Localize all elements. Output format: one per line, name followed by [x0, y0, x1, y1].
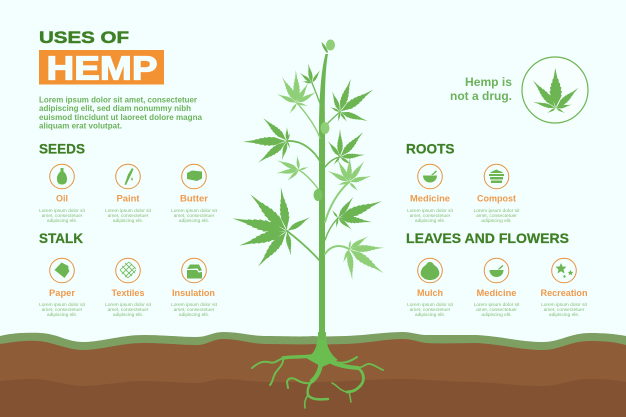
ground	[0, 332, 626, 417]
item: textiles: amet, consectetuer	[108, 307, 149, 313]
item: mulch	[407, 258, 454, 318]
leaf: upper left light	[276, 70, 317, 114]
item: insulation: adipiscing elit.	[179, 312, 209, 318]
item: compost: Compost	[477, 194, 517, 204]
item: textiles: Textiles	[112, 288, 144, 299]
heading: leaves and flowers: LEAVES AND FLOWERS	[406, 230, 569, 246]
root crown	[306, 332, 338, 367]
item: medicine: Medicine	[410, 194, 450, 204]
leaf: middle left	[243, 116, 291, 166]
item: butter	[171, 164, 218, 224]
item: oil: Oil	[56, 194, 68, 204]
item: recreation: Recreation	[540, 288, 588, 299]
item: insulation	[171, 258, 218, 318]
callout: hemp is not a drug: Hemp is	[465, 77, 512, 89]
intro paragraph: aliquam erat volutpat.	[39, 122, 122, 130]
icon: hemp leaf badge	[522, 57, 588, 123]
item: mulch: adipiscing elit.	[415, 312, 445, 318]
title badge: hemp: HEMP	[46, 50, 158, 86]
panel: stalk	[39, 230, 218, 318]
stem buds	[314, 122, 330, 201]
item: paint	[105, 164, 152, 224]
item: medicine: Lorem ipsum dolor sit	[474, 302, 520, 308]
intro paragraph: euismod tincidunt ut laoreet dolore magna	[39, 113, 202, 122]
item: butter: Butter	[180, 194, 208, 204]
item: paper	[39, 258, 86, 318]
item: mulch: amet, consectetuer	[410, 307, 451, 313]
item: textiles	[105, 258, 152, 318]
item: medicine: Medicine	[476, 288, 516, 299]
item: medicine: amet, consectetuer	[476, 307, 517, 313]
panel: seeds	[39, 140, 218, 224]
item: medicine: adipiscing elit.	[481, 312, 512, 318]
intro paragraph	[39, 96, 202, 130]
title line: uses of: USES OF	[39, 29, 129, 47]
item: medicine: amet, consectetuer	[410, 213, 451, 219]
item: medicine: Lorem ipsum dolor sit	[407, 208, 454, 214]
item: medicine	[407, 164, 454, 224]
leaf: middle right	[326, 129, 366, 166]
leaf: large left	[231, 187, 312, 270]
item: butter: amet, consectetuer	[174, 213, 215, 219]
leaf: bottom right light	[342, 234, 386, 280]
item: oil: amet, consectetuer	[42, 213, 83, 219]
leaf: small left light	[276, 155, 309, 182]
leaf: top small	[299, 63, 321, 84]
item: oil: adipiscing elit.	[47, 218, 77, 224]
heading: stalk: STALK	[39, 230, 83, 246]
item: medicine	[474, 258, 520, 318]
panel: roots	[406, 140, 520, 224]
item: butter: Lorem ipsum dolor sit	[171, 208, 218, 214]
item: paper: Lorem ipsum dolor sit	[39, 302, 86, 308]
item: recreation: Lorem ipsum dolor sit	[541, 302, 588, 308]
leaf: right light	[327, 157, 372, 192]
item: compost: amet, consectetuer	[476, 213, 517, 219]
item: butter: adipiscing elit.	[179, 218, 209, 224]
panel: leaves and flowers	[406, 230, 588, 318]
title	[39, 29, 164, 86]
leaf: upper right	[330, 78, 376, 124]
item: paint: Paint	[116, 194, 140, 204]
item: compost	[474, 164, 520, 224]
intro paragraph: Lorem ipsum dolor sit amet, consectetuer	[39, 96, 198, 104]
leaf: lower right	[331, 195, 384, 231]
item: recreation: amet, consectetuer	[544, 307, 585, 313]
heading: seeds: SEEDS	[39, 140, 85, 156]
item: paper: amet, consectetuer	[42, 307, 83, 313]
item: paint: adipiscing elit.	[113, 218, 143, 224]
callout: hemp is not a drug: not a drug.	[450, 91, 512, 103]
item: oil: Lorem ipsum dolor sit	[39, 208, 86, 214]
item: textiles: adipiscing elit.	[113, 312, 143, 318]
heading: roots: ROOTS	[406, 140, 454, 156]
item: insulation: Lorem ipsum dolor sit	[171, 302, 218, 308]
plant	[231, 40, 386, 408]
item: paint: amet, consectetuer	[108, 213, 149, 219]
item: compost: Lorem ipsum dolor sit	[474, 208, 520, 214]
item: recreation: adipiscing elit.	[549, 312, 579, 318]
item: compost: adipiscing elit.	[481, 218, 512, 224]
item: recreation	[540, 258, 588, 318]
item: mulch: Lorem ipsum dolor sit	[407, 302, 454, 308]
top bud	[322, 40, 335, 53]
item: oil	[39, 164, 86, 224]
item: paint: Lorem ipsum dolor sit	[105, 208, 152, 214]
callout: hemp is not a drug	[450, 57, 588, 123]
roots	[252, 354, 383, 408]
item: insulation: Insulation	[172, 288, 215, 299]
item: insulation: amet, consectetuer	[174, 307, 215, 313]
main stem	[319, 54, 328, 340]
item: paper: adipiscing elit.	[47, 312, 77, 318]
item: textiles: Lorem ipsum dolor sit	[105, 302, 152, 308]
item: paper: Paper	[49, 288, 75, 299]
intro paragraph: adipiscing elit, sed diam nonummy nibh	[39, 104, 191, 113]
item: medicine: adipiscing elit.	[415, 218, 445, 224]
branches	[287, 83, 349, 261]
item: mulch: Mulch	[417, 288, 443, 299]
